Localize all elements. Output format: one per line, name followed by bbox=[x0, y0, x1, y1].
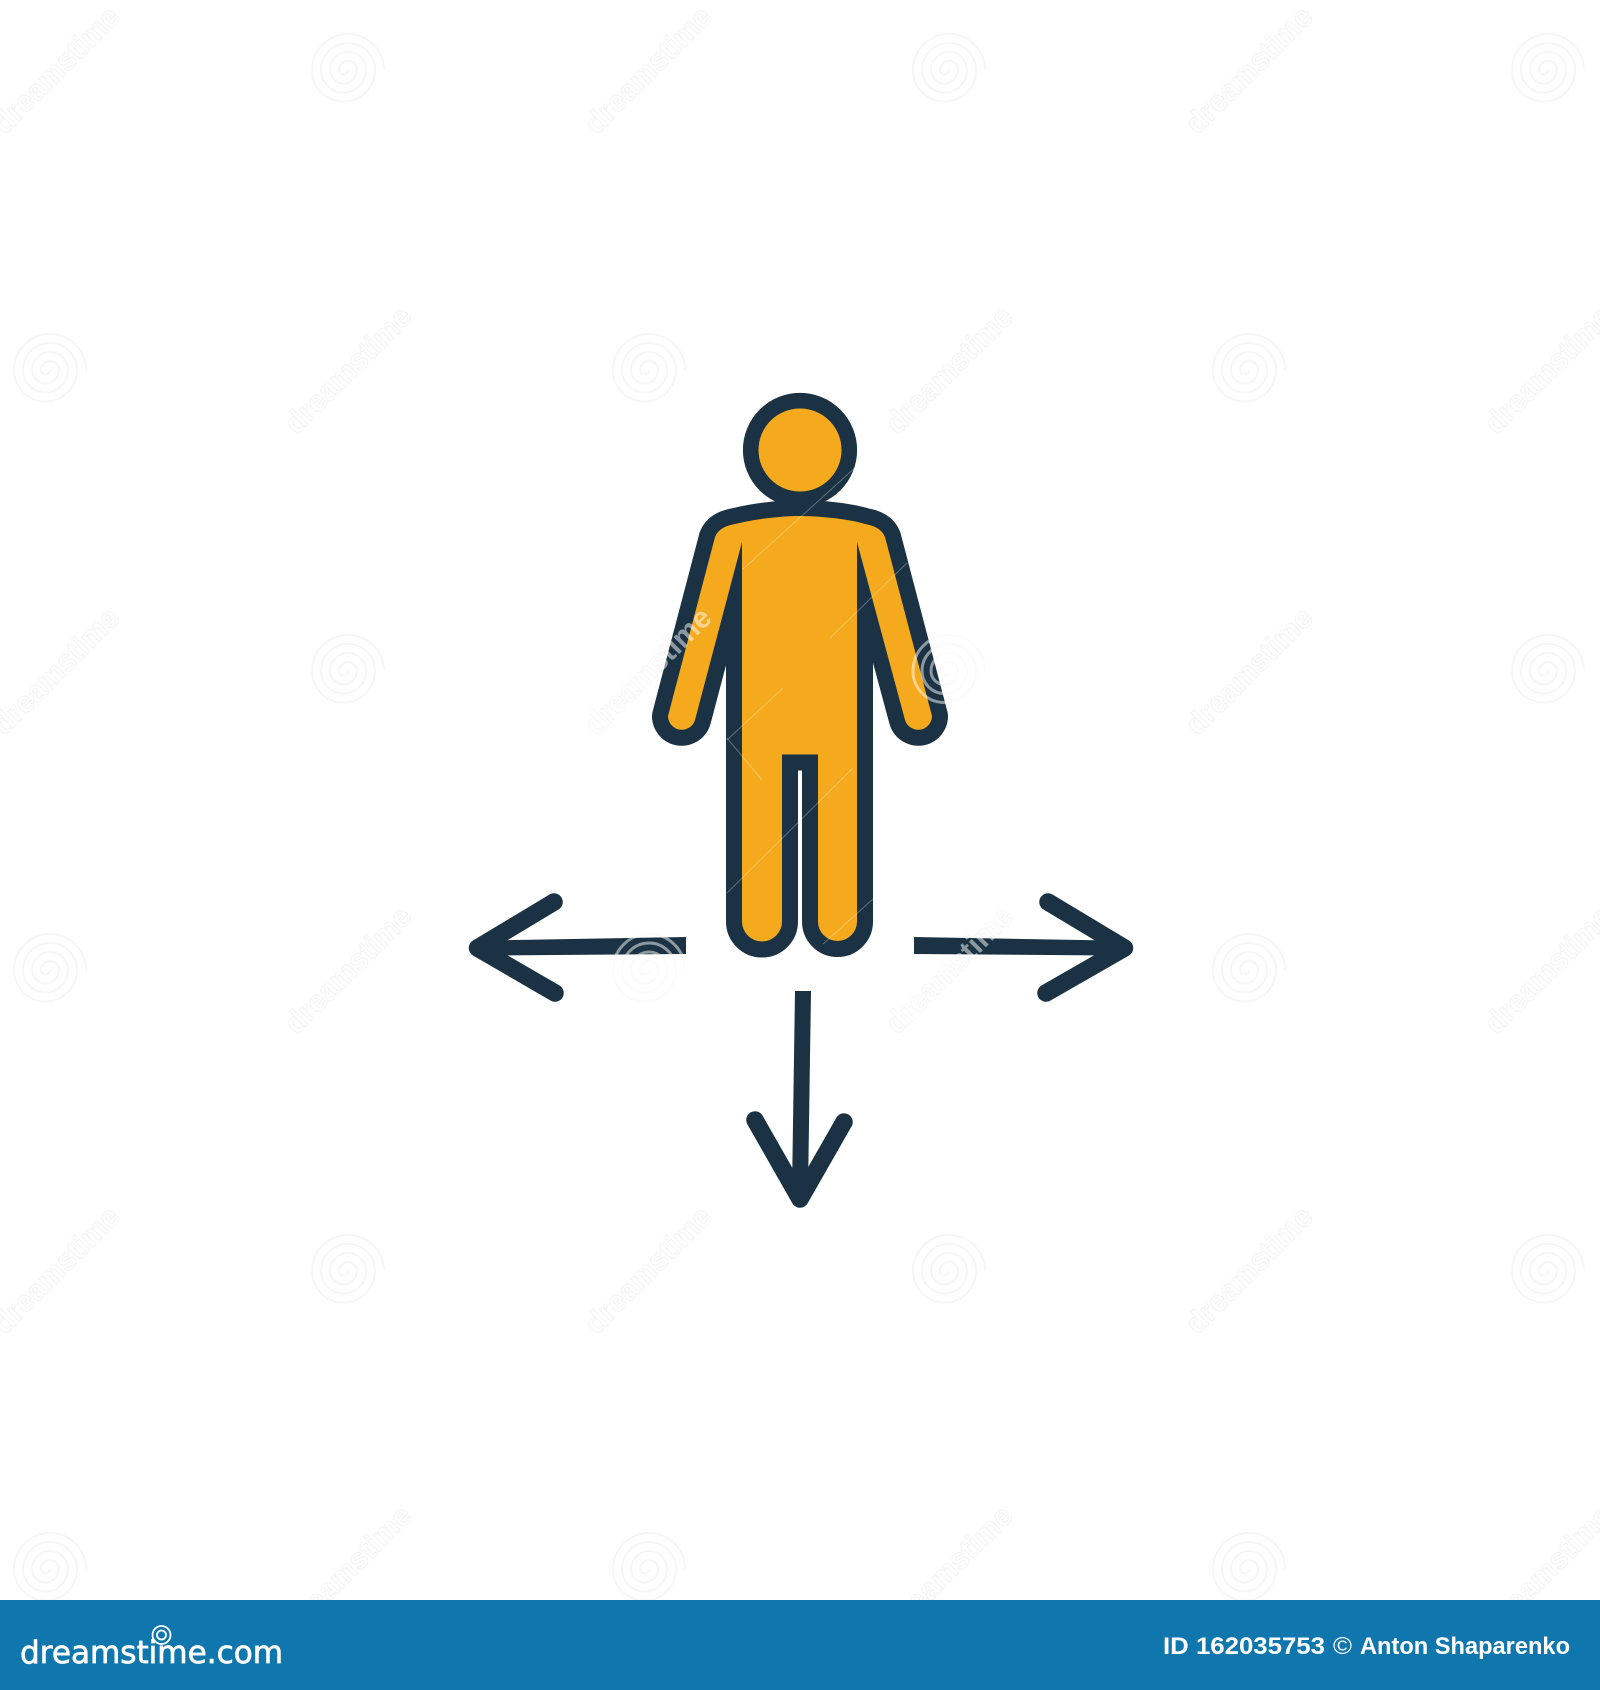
watermark overlay on figure: dreamstime bbox=[578, 601, 718, 741]
watermark pattern: dreamstime bbox=[578, 601, 718, 741]
watermark pattern: dreamstime bbox=[879, 300, 1019, 440]
watermark pattern: dreamstime bbox=[278, 1499, 418, 1639]
watermark pattern: dreamstime bbox=[278, 300, 418, 440]
watermark pattern: dreamstime bbox=[1179, 601, 1319, 741]
watermark overlay on figure bbox=[578, 466, 1019, 1040]
watermark pattern: dreamstime bbox=[879, 900, 1019, 1040]
icon: brand spiral bbox=[152, 1626, 170, 1644]
image credit: © bbox=[1333, 1633, 1352, 1660]
person head bbox=[751, 401, 849, 499]
arrow: left bbox=[478, 902, 686, 993]
brand name: dreamstime.com bbox=[20, 1635, 283, 1671]
arrow: right bbox=[914, 902, 1124, 993]
watermark pattern: dreamstime bbox=[1179, 0, 1319, 140]
footer bar bbox=[0, 1600, 1600, 1690]
person body bbox=[668, 516, 932, 942]
image credit: Anton Shaparenko bbox=[1360, 1633, 1570, 1660]
watermark pattern: dreamstime bbox=[578, 0, 718, 140]
watermark pattern: dreamstime bbox=[1179, 1200, 1319, 1340]
icon: standing person bbox=[668, 401, 932, 942]
watermark pattern: dreamstime bbox=[879, 1499, 1019, 1639]
watermark pattern: dreamstime bbox=[278, 900, 418, 1040]
watermark overlay on figure: dreamstime bbox=[879, 900, 1019, 1040]
image credit: ID 162035753 bbox=[1163, 1633, 1325, 1660]
watermark pattern: dreamstime bbox=[578, 1200, 718, 1340]
arrow: down bbox=[755, 991, 844, 1199]
image credit bbox=[1163, 1633, 1570, 1660]
